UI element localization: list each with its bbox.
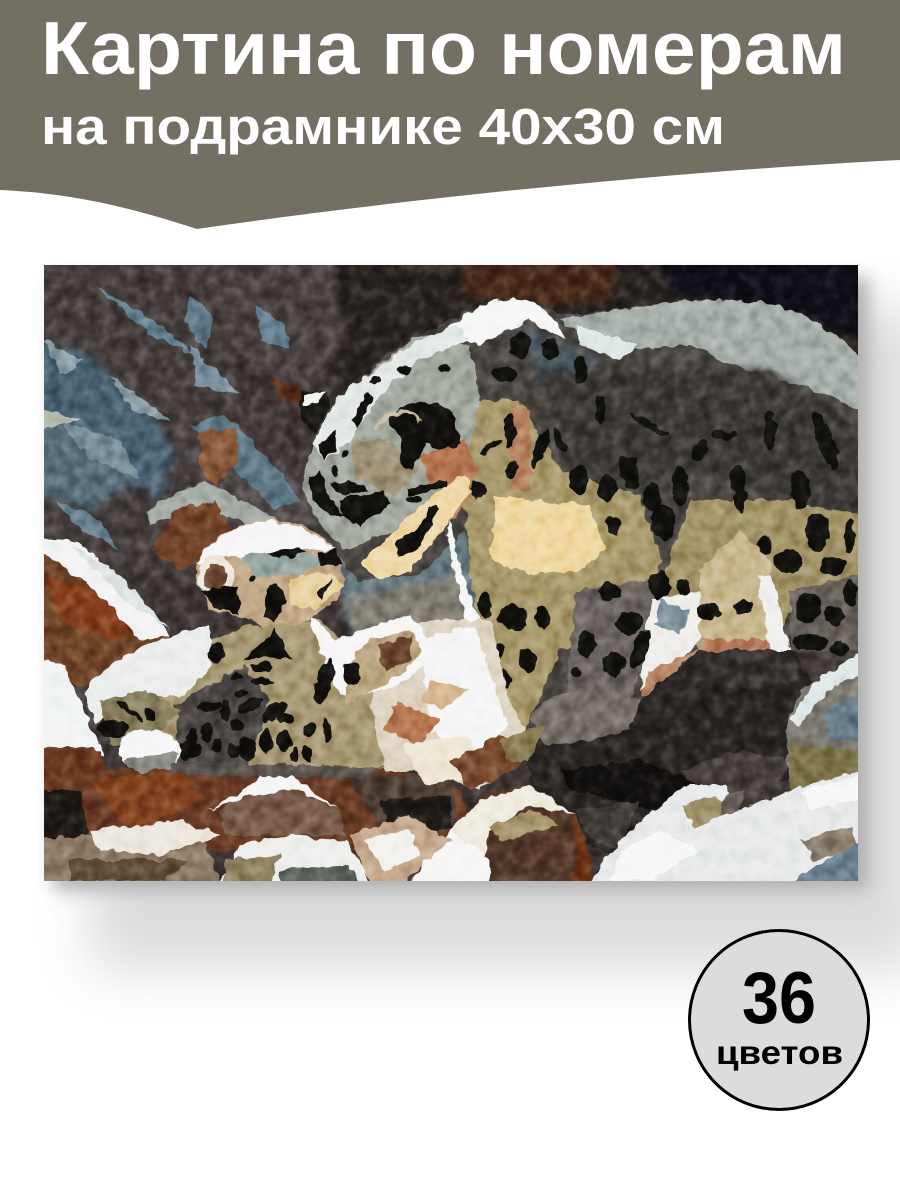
cap rock xyxy=(220,790,346,837)
cub face markings xyxy=(200,547,340,622)
tan shoulder and belly xyxy=(460,400,660,740)
adult leopard xyxy=(300,299,880,745)
centre boulder xyxy=(480,785,590,881)
head xyxy=(195,520,345,625)
peach chest xyxy=(510,405,530,490)
ear xyxy=(300,392,330,435)
snow ground centre xyxy=(350,620,545,790)
cub xyxy=(85,520,430,778)
badge number: 36 xyxy=(742,958,816,1039)
whisker fur xyxy=(445,521,480,622)
dark boulders xyxy=(530,650,820,860)
paint texture xyxy=(44,265,858,881)
title: Картина по номерам xyxy=(41,6,846,90)
cub ear xyxy=(198,555,234,595)
cub spots xyxy=(98,630,362,762)
cream patch xyxy=(490,495,605,575)
white fluff xyxy=(85,625,212,725)
chin xyxy=(360,470,470,580)
badge: 36 colours xyxy=(690,930,868,1110)
grey leg xyxy=(567,579,655,698)
snow drift xyxy=(591,772,858,881)
snow mound xyxy=(120,730,180,772)
dark flank xyxy=(540,370,880,510)
bottom snow and earth xyxy=(44,834,220,881)
raised arm xyxy=(308,610,430,695)
body spots xyxy=(470,331,857,690)
rocky background xyxy=(44,265,858,881)
cub body xyxy=(145,620,385,770)
banner xyxy=(0,0,900,229)
eye patch xyxy=(388,402,462,470)
head xyxy=(303,335,480,550)
leg gap xyxy=(640,590,700,690)
snowy back xyxy=(560,298,858,410)
face markings xyxy=(308,363,452,558)
badge label: цветов xyxy=(716,1034,843,1071)
right boulder xyxy=(785,676,858,790)
body silhouette xyxy=(303,299,880,745)
foreground rocks xyxy=(44,648,858,881)
ground line xyxy=(170,762,385,778)
painting: snow leopards xyxy=(44,265,858,881)
subtitle: на подрамнике 40х30 см xyxy=(41,98,725,155)
grey paw xyxy=(530,690,640,745)
canvas shadow xyxy=(54,278,900,970)
left rocks and snow xyxy=(44,538,170,840)
